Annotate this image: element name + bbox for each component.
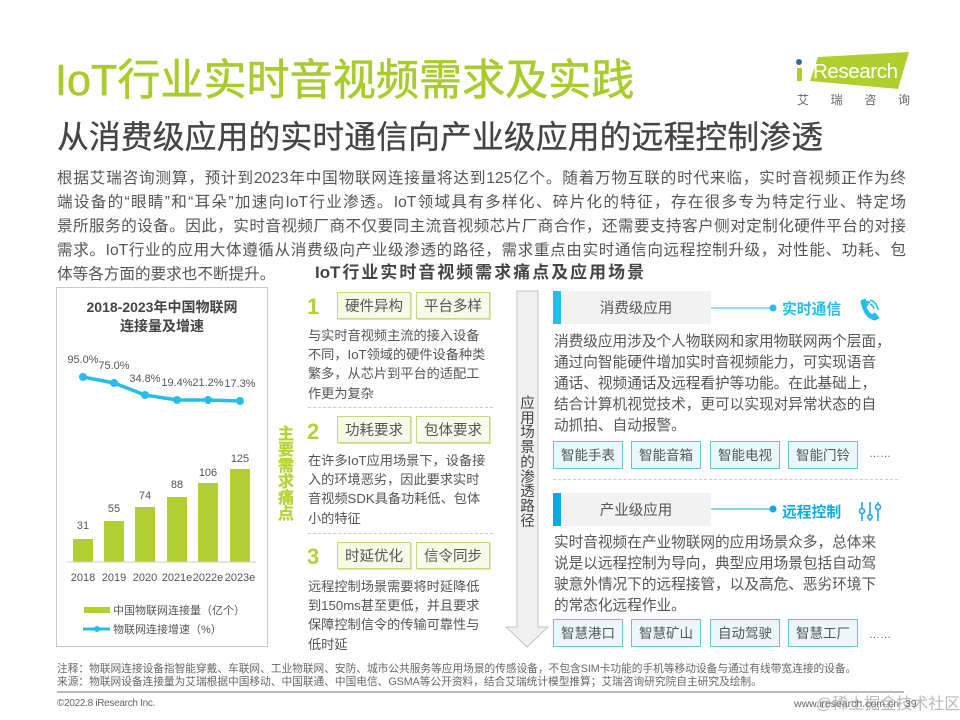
tag: 智慧矿山 xyxy=(639,626,693,641)
vertical label: main pain points: 主要需求痛点 xyxy=(278,426,294,523)
line chart: growth rate: 95.0% xyxy=(67,354,99,366)
watermark: @稀土掘金技术社区 xyxy=(816,696,960,713)
panel: consumer applications xyxy=(553,291,891,469)
description: 作更为复杂 xyxy=(308,386,374,401)
description: 消费级应用涉及个人物联网和家用物联网两个层面， xyxy=(554,334,891,350)
number 2: 2 xyxy=(307,419,319,444)
tag xyxy=(788,619,858,647)
description: 实时音视频在产业物联网的应用场景众多，总体来 xyxy=(554,535,876,551)
chart legend xyxy=(83,603,245,636)
line chart: growth rate: 17.3% xyxy=(224,378,256,390)
description: 在许多IoT应用场景下，设备接 xyxy=(308,453,485,468)
intro paragraph xyxy=(57,170,906,283)
tag: 硬件异构 xyxy=(345,299,403,315)
tag: 智能音箱 xyxy=(639,448,693,463)
accent bar xyxy=(553,291,561,324)
panel: industrial applications xyxy=(553,493,891,647)
description: 结合计算机视觉技术，更可以实现对异常状态的自 xyxy=(554,397,876,413)
number 1: 1 xyxy=(307,294,319,319)
description: 入的环境恶劣，因此要求实时 xyxy=(308,472,479,487)
connector xyxy=(711,506,776,512)
tag: 自动驾驶 xyxy=(718,626,772,641)
tag xyxy=(710,441,780,469)
description: 繁多，从芯片到平台的适配工 xyxy=(308,366,479,381)
intro paragraph: 端设备的“眼睛”和“耳朵”加速向IoT行业渗透。IoT领域具有多样化、碎片化的特征，存在很多专为特定行业、特定场 xyxy=(57,194,906,211)
bar chart: connections: 2021e xyxy=(162,572,192,584)
logo: iResearch xyxy=(796,52,910,108)
description: 音视频SDK具备功耗低、包体 xyxy=(308,491,480,506)
tag: 信令同步 xyxy=(424,549,482,565)
tag: 平台多样 xyxy=(424,299,482,315)
pain point 2 xyxy=(307,416,491,526)
intro paragraph: 景所服务的设备。因此，实时音视频厂商不仅要同主流音视频芯片厂商合作，还需要支持客户侧对定制化硬件平台的对接 xyxy=(57,218,906,235)
bar chart: connections: 55 xyxy=(108,503,120,515)
bar chart: connections: 31 xyxy=(77,520,89,532)
pain point 1 xyxy=(307,292,491,401)
icon: sliders xyxy=(858,502,882,521)
tag xyxy=(710,619,780,647)
panel: chart xyxy=(56,287,268,647)
bar chart: connections: 2020 xyxy=(133,572,157,584)
intro paragraph: 需求。IoT行业的应用大体遵循从消费级向产业级渗透的路径，需求重点由实时通信向远程控制升级，对性能、功耗、包 xyxy=(57,242,906,259)
tag: 包体要求 xyxy=(424,423,482,439)
tag xyxy=(788,441,858,469)
tag xyxy=(337,542,411,569)
tag xyxy=(416,542,490,569)
description: 与实时音视频主流的接入设备 xyxy=(308,328,479,343)
intro paragraph: 根据艾瑞咨询测算，预计到2023年中国物联网连接量将达到125亿个。随着万物互联的时代来临，实时音视频正作为终 xyxy=(57,170,906,187)
logo: iResearch: Research xyxy=(813,60,898,83)
copyright: ©2022.8 iResearch Inc. xyxy=(57,698,155,709)
ellipsis: …… xyxy=(869,629,891,641)
bar chart: connections: 125 xyxy=(231,453,249,465)
subtitle: 从消费级应用的实时通信向产业级应用的远程控制渗透 xyxy=(57,119,823,155)
tag xyxy=(631,441,701,469)
line chart: growth rate: 75.0% xyxy=(98,360,130,372)
line chart: growth rate: 21.2% xyxy=(192,377,224,389)
description xyxy=(308,579,479,652)
arrow: penetration path: 应用场景的渗透路径 xyxy=(520,396,535,530)
chart legend: 物联网连接增速（%） xyxy=(113,622,222,636)
tag: 功耗要求 xyxy=(345,423,403,439)
description xyxy=(554,534,876,614)
tag xyxy=(553,619,623,647)
tag: 时延优化 xyxy=(345,549,403,565)
tag xyxy=(337,292,411,319)
tag: 智慧港口 xyxy=(561,626,615,641)
tag: 智能手表 xyxy=(561,448,615,463)
heading: pain points and scenarios: IoT行业实时音视频需求痛点及应用场景 xyxy=(315,263,644,282)
divider xyxy=(308,533,493,534)
description: 驶意外情况下的远程接管，以及高危、恶劣环境下 xyxy=(554,577,876,593)
description: 动抓拍、自动报警。 xyxy=(554,418,686,434)
website and page number: www.iresearch.com.cn 39 xyxy=(794,698,917,710)
bar chart: connections: 2023e xyxy=(225,572,255,584)
tag xyxy=(416,416,490,443)
footnotes: 注释：物联网连接设备指智能穿戴、车联网、工业物联网、安防、城市公共服务等应用场景的传感设备，不包含SIM卡功能的手机等移动设备与通过有线带宽连接的设备。 xyxy=(57,663,856,675)
number 3: 3 xyxy=(307,544,319,569)
bar chart: connections: 106 xyxy=(199,467,217,479)
accent bar xyxy=(553,493,561,526)
chart title: 2018-2023年中国物联网 xyxy=(87,299,237,315)
divider xyxy=(553,479,898,480)
heading: 消费级应用 xyxy=(600,301,672,317)
description: 的常态化远程作业。 xyxy=(554,598,686,614)
description xyxy=(308,328,485,401)
intro paragraph: 体等各方面的要求也不断提升。 xyxy=(57,266,275,283)
description: 通话、视频通话及远程看护等功能。在此基础上， xyxy=(554,376,876,392)
line chart: growth rate: 19.4% xyxy=(161,377,193,389)
chart title: 连接量及增速 xyxy=(120,318,204,334)
arrow: penetration path xyxy=(505,290,549,648)
description: 说是以远程控制为导向，典型应用场景包括自动驾 xyxy=(554,556,876,572)
label: real-time communication: 实时通信 xyxy=(782,302,841,318)
bar chart: connections: 2018 xyxy=(71,572,95,584)
description xyxy=(554,333,891,434)
bar chart: connections: 2022e xyxy=(193,572,223,584)
connector xyxy=(711,304,776,312)
heading xyxy=(561,493,711,526)
footnotes: 来源：物联网设备连接量为艾瑞根据中国移动、中国联通、中国电信、GSMA等公开资料，结合艾瑞统计模型推算；艾瑞咨询研究院自主研究及绘制。 xyxy=(57,676,762,688)
line chart: growth rate: 34.8% xyxy=(129,373,161,385)
label: remote control: 远程控制 xyxy=(782,505,841,521)
footer rule xyxy=(57,691,904,693)
description: 保障控制信令的传输可靠性与 xyxy=(308,617,479,632)
divider xyxy=(308,407,493,408)
ellipsis: …… xyxy=(869,448,891,460)
tag xyxy=(553,441,623,469)
description: 远程控制场景需要将时延降低 xyxy=(308,579,479,594)
description: 低时延 xyxy=(308,637,348,652)
chart legend: 中国物联网连接量（亿个） xyxy=(113,603,245,617)
description: 不同，IoT领域的硬件设备种类 xyxy=(308,347,485,362)
pain point 3 xyxy=(307,542,491,652)
tag: 智能门铃 xyxy=(796,448,850,463)
bar chart: connections: 88 xyxy=(171,479,183,491)
chart title xyxy=(87,299,237,334)
description: 通过向智能硬件增加实时音视频能力，可实现语音 xyxy=(554,355,876,371)
tag: 智能电视 xyxy=(718,448,772,463)
line chart: growth rate xyxy=(67,354,256,405)
tag: 智慧工厂 xyxy=(796,626,850,641)
description: 小的特征 xyxy=(308,511,361,526)
tag xyxy=(631,619,701,647)
bar chart: connections xyxy=(67,453,256,584)
title: IoT行业实时音视频需求及实践 xyxy=(55,57,634,105)
footnotes xyxy=(57,662,856,688)
icon: phone xyxy=(860,298,880,320)
logo: iResearch: 艾 瑞 咨 询 xyxy=(797,91,910,108)
heading: 产业级应用 xyxy=(600,503,672,519)
description: 到150ms甚至更低，并且要求 xyxy=(308,598,479,613)
tag xyxy=(416,292,490,319)
description xyxy=(308,453,485,526)
bar chart: connections: 2019 xyxy=(102,572,126,584)
tag xyxy=(337,416,411,443)
heading xyxy=(561,291,711,324)
bar chart: connections: 74 xyxy=(139,490,151,502)
